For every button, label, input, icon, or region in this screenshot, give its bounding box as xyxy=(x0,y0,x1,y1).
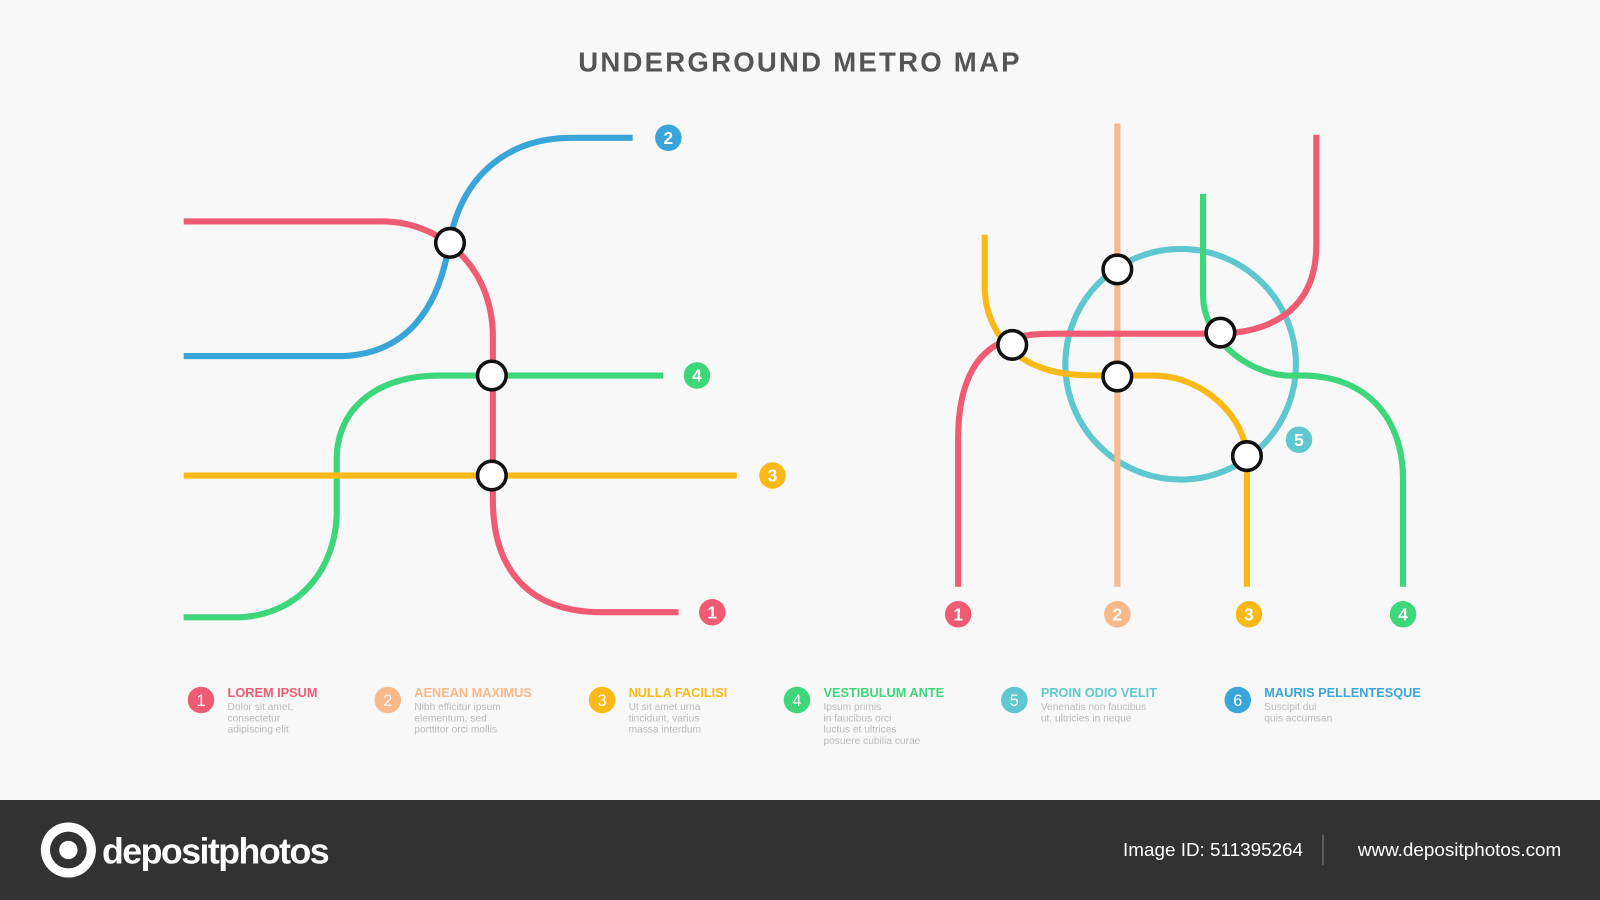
legend 5: Venenatis non faucibus xyxy=(1041,702,1146,713)
line: green xyxy=(1203,194,1403,587)
legend xyxy=(188,685,1421,747)
right line labels: 3 xyxy=(1244,604,1254,624)
line: yellow xyxy=(184,473,737,479)
legend 3: NULLA FACILISI xyxy=(629,685,727,700)
legend 2: 2 xyxy=(383,692,392,710)
legend 4: posuere cubilia curae xyxy=(823,736,921,747)
legend 3: 3 xyxy=(598,692,607,710)
left line labels: 4 xyxy=(692,366,702,386)
legend 1: consectetur xyxy=(228,713,281,724)
legend 4: 4 xyxy=(792,692,801,710)
legend 3: tincidunt, varius xyxy=(629,713,699,724)
right line labels: 4 xyxy=(1398,604,1408,624)
legend 1 xyxy=(188,685,318,736)
legend 3 xyxy=(589,685,727,736)
right line labels xyxy=(945,427,1416,628)
legend 6: MAURIS PELLENTESQUE xyxy=(1264,685,1421,700)
line: green xyxy=(184,376,663,617)
legend 1: adipiscing elit xyxy=(228,725,289,736)
left line labels: 1 xyxy=(707,602,717,622)
line: orange xyxy=(1114,123,1120,587)
footer bar: www.depositphotos.com xyxy=(1357,839,1561,860)
legend 1: 1 xyxy=(196,692,206,710)
right line labels: 1 xyxy=(953,604,963,624)
footer bar xyxy=(0,800,1600,900)
legend 4: in faucibus orci xyxy=(823,713,891,724)
right line labels: 5 xyxy=(1294,430,1304,450)
legend 3: Ut sit amet urna xyxy=(629,702,701,713)
legend 3: massa interdum xyxy=(629,725,701,736)
line: cyan ring xyxy=(1065,249,1296,480)
legend 5: PROIN ODIO VELIT xyxy=(1041,685,1157,700)
legend 4: luctus et ultrices xyxy=(823,725,897,736)
legend 1: Dolor sit amet, xyxy=(228,702,293,713)
legend 6: Suscipit dui xyxy=(1264,702,1316,713)
footer logo xyxy=(41,822,329,878)
legend 6 xyxy=(1224,685,1421,724)
left line labels xyxy=(655,124,786,626)
legend 4: Ipsum primis xyxy=(823,702,881,713)
stations xyxy=(436,229,506,490)
legend 4 xyxy=(784,685,944,747)
legend 2: Nibh efficitur ipsum xyxy=(414,702,501,713)
right metro map xyxy=(958,123,1403,587)
line: yellow xyxy=(985,235,1247,587)
legend 4: VESTIBULUM ANTE xyxy=(823,685,944,700)
left line labels: 2 xyxy=(664,128,673,148)
right line labels: 2 xyxy=(1113,604,1122,624)
left line labels: 3 xyxy=(768,466,778,486)
legend 2: elementum, sed xyxy=(414,713,487,724)
legend 6: 6 xyxy=(1233,692,1242,710)
legend 5: 5 xyxy=(1010,692,1019,710)
line: red xyxy=(184,221,679,612)
legend 5: ut, ultricies in neque xyxy=(1041,713,1132,724)
legend 6: quis accumsan xyxy=(1264,713,1332,724)
footer logo: depositphotos xyxy=(102,831,329,871)
legend 2: AENEAN MAXIMUS xyxy=(414,685,532,700)
line: blue xyxy=(184,138,633,356)
legend 2: porttitor orci mollis xyxy=(414,725,497,736)
line: red xyxy=(958,135,1316,587)
left metro map xyxy=(184,138,737,617)
title: UNDERGROUND METRO MAP xyxy=(578,46,1022,77)
legend 2 xyxy=(374,685,532,736)
legend 1: LOREM IPSUM xyxy=(228,685,318,700)
legend 5 xyxy=(1001,685,1157,724)
stations xyxy=(998,255,1261,470)
footer image id: Image ID: 511395264 xyxy=(1123,839,1303,860)
